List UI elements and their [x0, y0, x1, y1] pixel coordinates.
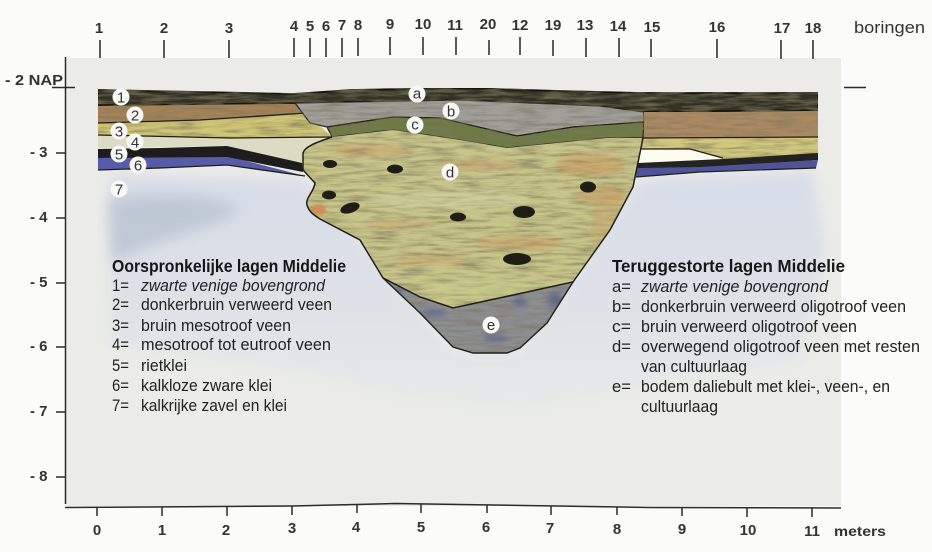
legend: original layers: Oorspronkelijke lagen Middelie: [112, 256, 346, 276]
boring numbers and ticks: 4: [290, 18, 299, 35]
boring numbers and ticks: 6: [322, 18, 330, 35]
horizontal meters axis: 4: [352, 519, 361, 536]
layer labels: 4: [131, 134, 139, 152]
boring numbers and ticks: 13: [577, 17, 593, 34]
boring numbers and ticks: 17: [774, 20, 790, 37]
horizontal meters axis: 0: [93, 522, 101, 539]
horizontal meters axis: 5: [417, 519, 425, 536]
horizontal meters axis: 10: [740, 522, 756, 539]
legend: backfilled layers: cultuurlaag: [641, 398, 718, 416]
boring numbers and ticks: 1: [95, 20, 103, 37]
legend: backfilled layers: a=: [612, 278, 631, 296]
boring numbers and ticks: 20: [480, 16, 496, 33]
horizontal meters axis: 9: [678, 521, 686, 538]
layer d: backfilled peat with culture remains: [303, 130, 643, 308]
boring numbers and ticks: 9: [386, 16, 394, 33]
boring numbers and ticks: 14: [610, 18, 627, 35]
layer 5: black clay right: [637, 153, 818, 168]
boring numbers and ticks: 5: [306, 18, 314, 35]
legend: backfilled layers: c=: [612, 318, 631, 336]
legend: backfilled layers: overwegend oligotroof veen met resten: [641, 338, 920, 356]
horizontal meters axis: 7: [546, 520, 554, 537]
legend: original layers: mesotroof tot eutroof veen: [141, 336, 331, 354]
boring numbers and ticks: 7: [338, 17, 346, 34]
boring numbers and ticks: 8: [354, 17, 362, 34]
legend: original layers: rietklei: [141, 357, 187, 375]
boring numbers and ticks: boringen: [854, 18, 925, 37]
legend: original layers: 5=: [112, 357, 129, 375]
legend: original layers: zwarte venige bovengrond: [140, 277, 326, 295]
boring numbers and ticks: 3: [225, 20, 233, 37]
horizontal meters axis: [65, 504, 886, 540]
layer labels: d: [446, 164, 454, 182]
horizontal meters axis: 1: [158, 522, 166, 539]
layer e: bottom of the dalle mound: [383, 278, 573, 353]
horizontal meters axis: 2: [222, 522, 230, 539]
layer c: green-brown peat: [327, 117, 644, 148]
boring numbers and ticks: 18: [805, 20, 821, 37]
legend: original layers: kalkloze zware klei: [141, 377, 272, 395]
legend: backfilled layers: van cultuurlaag: [641, 358, 747, 376]
legend: original layers: 3=: [112, 317, 129, 335]
white lens: [639, 149, 723, 163]
layer 3: yellow peat left: [98, 113, 332, 138]
layer 6: blue clay right: [636, 160, 818, 177]
layer labels: 7: [115, 182, 123, 198]
boring numbers and ticks: 16: [709, 19, 725, 36]
horizontal meters axis: 11: [804, 523, 820, 540]
legend: backfilled layers: donkerbruin verweerd oligotroof veen: [641, 298, 906, 316]
layer 5: black clay left: [98, 146, 303, 172]
legend: original layers: 6=: [112, 377, 129, 395]
legend: original layers: 2=: [112, 296, 129, 314]
horizontal meters axis: meters: [834, 523, 886, 539]
layer 2: brown peat left: [98, 102, 306, 123]
legend: original layers: 4=: [112, 336, 129, 354]
vertical depth axis: - 7: [30, 403, 48, 420]
layer 4: pale peat left: [98, 135, 332, 163]
legend: backfilled layers: bruin verweerd oligotroof veen: [641, 318, 857, 336]
layer labels: c: [411, 116, 419, 134]
original layers right: [636, 110, 818, 177]
horizontal meters axis: 3: [288, 520, 296, 537]
layer 2: brown peat right: [642, 110, 818, 139]
layer labels: 5: [115, 146, 123, 164]
legend: original layers: donkerbruin verweerd veen: [141, 296, 332, 314]
legend: original layers: bruin mesotroof veen: [141, 317, 291, 335]
layer labels: [110, 86, 500, 334]
layer labels: 3: [115, 124, 123, 140]
boring numbers and ticks: 15: [644, 19, 660, 36]
horizontal meters axis: 6: [482, 519, 490, 536]
boring numbers and ticks: 11: [447, 17, 463, 34]
layer labels: e: [487, 317, 495, 334]
vertical depth axis: [5, 57, 866, 504]
legend: backfilled layers: Teruggestorte lagen Middelie: [612, 256, 845, 276]
layer labels: b: [447, 104, 455, 120]
vertical depth axis: - 6: [30, 338, 48, 355]
layer 7: pale blue clay: [108, 172, 825, 410]
boring numbers and ticks: 2: [160, 20, 168, 37]
layer labels: 1: [117, 90, 125, 106]
boring numbers and ticks: [95, 16, 925, 59]
vertical depth axis: - 3: [30, 144, 48, 161]
legend: backfilled layers: [612, 256, 920, 416]
layer a: black topsoil: [98, 88, 818, 112]
vertical depth axis: - 2 NAP: [5, 72, 63, 89]
layer b: grey weathered peat: [295, 100, 644, 136]
vertical depth axis: - 4: [30, 209, 48, 226]
survey panel background: [66, 58, 841, 506]
legend: backfilled layers: b=: [612, 298, 631, 316]
original layers left: [98, 102, 332, 176]
horizontal meters axis: 8: [613, 521, 621, 538]
boring numbers and ticks: 12: [512, 17, 528, 34]
culture layer clods: [322, 160, 596, 265]
legend: backfilled layers: zwarte venige bovengrond: [640, 278, 829, 296]
boring numbers and ticks: 10: [415, 16, 431, 33]
legend: original layers: 7=: [112, 397, 129, 415]
legend: original layers: kalkrijke zavel en klei: [141, 397, 287, 415]
layer 6: blue clay left: [98, 156, 305, 176]
layer labels: 2: [131, 108, 139, 124]
legend: original layers: [112, 256, 346, 415]
layer 3: yellow peat right: [642, 137, 818, 159]
vertical depth axis: - 8: [30, 468, 48, 485]
legend: backfilled layers: bodem daliebult met klei-, veen-, en: [641, 378, 890, 396]
legend: backfilled layers: d=: [612, 338, 631, 356]
boring numbers and ticks: 19: [545, 17, 561, 34]
legend: original layers: 1=: [112, 277, 129, 295]
vertical depth axis: - 5: [30, 274, 48, 291]
legend: backfilled layers: e=: [612, 378, 631, 396]
layer labels: 6: [134, 158, 142, 174]
layer labels: a: [413, 86, 422, 102]
